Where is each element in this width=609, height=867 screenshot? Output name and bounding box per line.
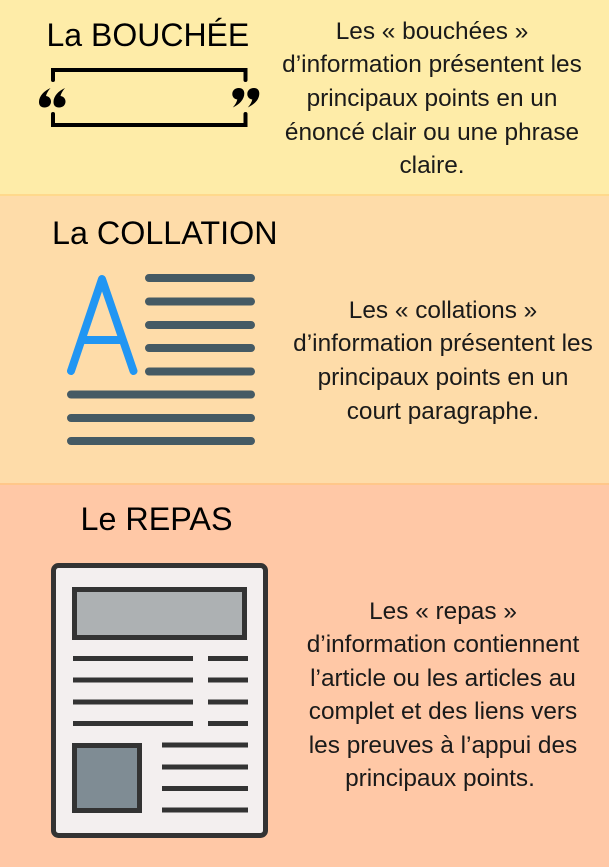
text: bouchée description: principaux points en un	[307, 85, 557, 112]
text: bouchée description: claire.	[399, 152, 465, 179]
text: collation description	[293, 297, 593, 425]
icon: letter A with text lines	[67, 274, 255, 445]
text: collation description: d’information présentent les	[293, 330, 593, 357]
heading: le repas: Le REPAS	[80, 501, 232, 537]
text: repas description: l’article ou les articles au	[310, 665, 576, 692]
heading: la collation: La COLLATION	[52, 215, 278, 251]
text: repas description: principaux points.	[345, 765, 535, 792]
text: repas description: d’information contiennent	[307, 631, 579, 658]
text: repas description: Les « repas »	[369, 598, 517, 625]
text: repas description: les preuves à l’appui des	[309, 732, 577, 759]
text: repas description: complet et des liens vers	[309, 698, 577, 725]
text: bouchée description: Les « bouchées »	[336, 18, 528, 45]
text: collation description: principaux points en un	[318, 364, 568, 391]
panel: la collation	[0, 196, 609, 485]
heading: la bouchée: La BOUCHÉE	[46, 17, 249, 53]
text: repas description	[307, 598, 580, 792]
text: bouchée description: d’information présentent les	[282, 51, 582, 78]
panel: la bouchée	[0, 0, 609, 196]
icon: quotation frame	[39, 68, 260, 127]
panel: le repas	[0, 485, 609, 867]
text: collation description: court paragraphe.	[347, 398, 539, 425]
text: bouchée description: énoncé clair ou une phrase	[285, 119, 579, 146]
text: bouchée description	[282, 18, 582, 179]
text: collation description: Les « collations »	[349, 297, 537, 324]
